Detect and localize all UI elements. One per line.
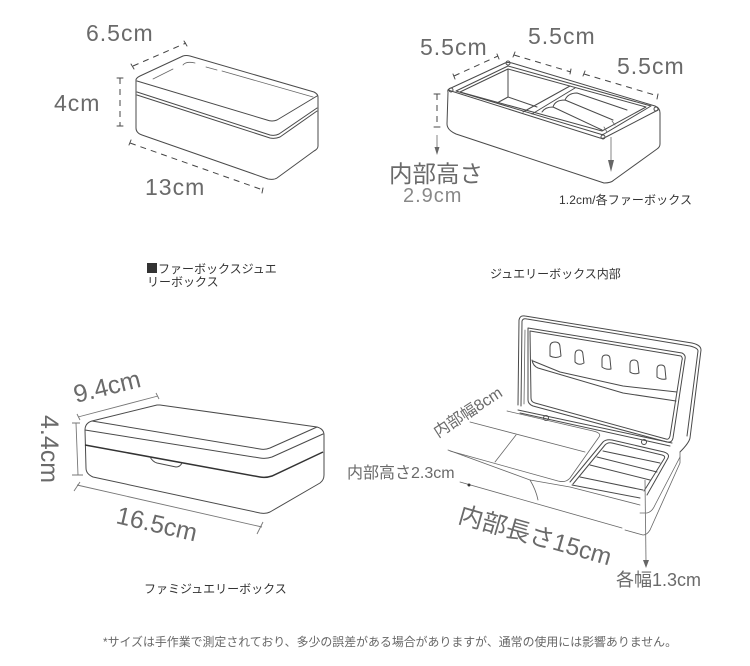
label: internal width 8cm: 内部幅8cm xyxy=(430,384,506,441)
lid frame xyxy=(518,316,701,452)
dimension: depth 9.4cm xyxy=(71,365,159,420)
caption: family box: ファミジュエリーボックス xyxy=(144,582,287,596)
dimension: depth 9.4cm: 9.4cm xyxy=(71,365,144,409)
left compartment xyxy=(450,411,600,482)
caption: fur box: ファーボックスジュエ xyxy=(158,262,277,276)
dimension: width 16.5cm: 16.5cm xyxy=(114,502,200,547)
ring compartment xyxy=(570,440,668,495)
icon: open family box drawing xyxy=(448,316,701,535)
label: internal height xyxy=(389,161,483,207)
dimension: height 4.4cm: 4.4cm xyxy=(35,415,63,483)
caption: fur box: リーボックス xyxy=(147,275,219,289)
lid pocket xyxy=(532,360,676,401)
dimension: compartment 5.5cm middle xyxy=(513,23,596,74)
dimension: width 13cm: 13cm xyxy=(145,174,205,200)
icon: closed fur box drawing xyxy=(136,56,318,179)
label: internal height: 2.9cm xyxy=(403,185,462,207)
dimension: width 13cm xyxy=(129,140,263,200)
dimension: compartment 5.5cm right: 5.5cm xyxy=(617,53,685,79)
dimension: height 4.4cm xyxy=(35,415,83,483)
caption: interior: ジュエリーボックス内部 xyxy=(490,267,621,281)
dimension: fur slot width arrow xyxy=(608,137,614,172)
panel: family box interior xyxy=(347,316,701,590)
dimension: depth 6.5cm xyxy=(86,20,187,69)
dimension: internal height arrow xyxy=(434,94,440,155)
lid ring holes xyxy=(550,342,561,358)
dimension: depth 6.5cm: 6.5cm xyxy=(86,20,154,46)
dimension: compartment 5.5cm right xyxy=(583,53,685,99)
panel: fur box interior xyxy=(389,23,692,207)
label: internal height 2.3cm: 内部高さ2.3cm xyxy=(347,464,455,482)
dimension: height 4cm: 4cm xyxy=(54,90,100,116)
label: internal length 15cm: 内部長さ15cm xyxy=(455,501,615,571)
caption: fur box xyxy=(147,262,277,289)
dimension: compartment 5.5cm left: 5.5cm xyxy=(420,34,488,60)
label: internal height: 内部高さ xyxy=(389,161,483,187)
footnote: *サイズは手作業で測定されており、多少の誤差がある場合がありますが、通常の使用には影響ありません。 xyxy=(103,635,677,649)
dimension: compartment 5.5cm middle: 5.5cm xyxy=(528,23,596,49)
panel: fur box outer dimensions xyxy=(54,20,318,200)
label: each slot width 1.3cm: 各幅1.3cm xyxy=(616,570,701,590)
dimension: width 16.5cm xyxy=(74,482,263,547)
dimension: compartment 5.5cm left xyxy=(420,34,499,79)
icon: closed family box drawing xyxy=(85,405,324,513)
front edges xyxy=(448,450,640,505)
dimension: slot width arrow xyxy=(643,480,649,568)
icon: open tray drawing xyxy=(447,61,660,183)
label: fur slot width: 1.2cm/各ファーボックス xyxy=(559,192,692,207)
dimension: height 4cm xyxy=(54,78,123,126)
panel: family box outer dimensions xyxy=(35,365,324,547)
hinges xyxy=(518,410,672,446)
